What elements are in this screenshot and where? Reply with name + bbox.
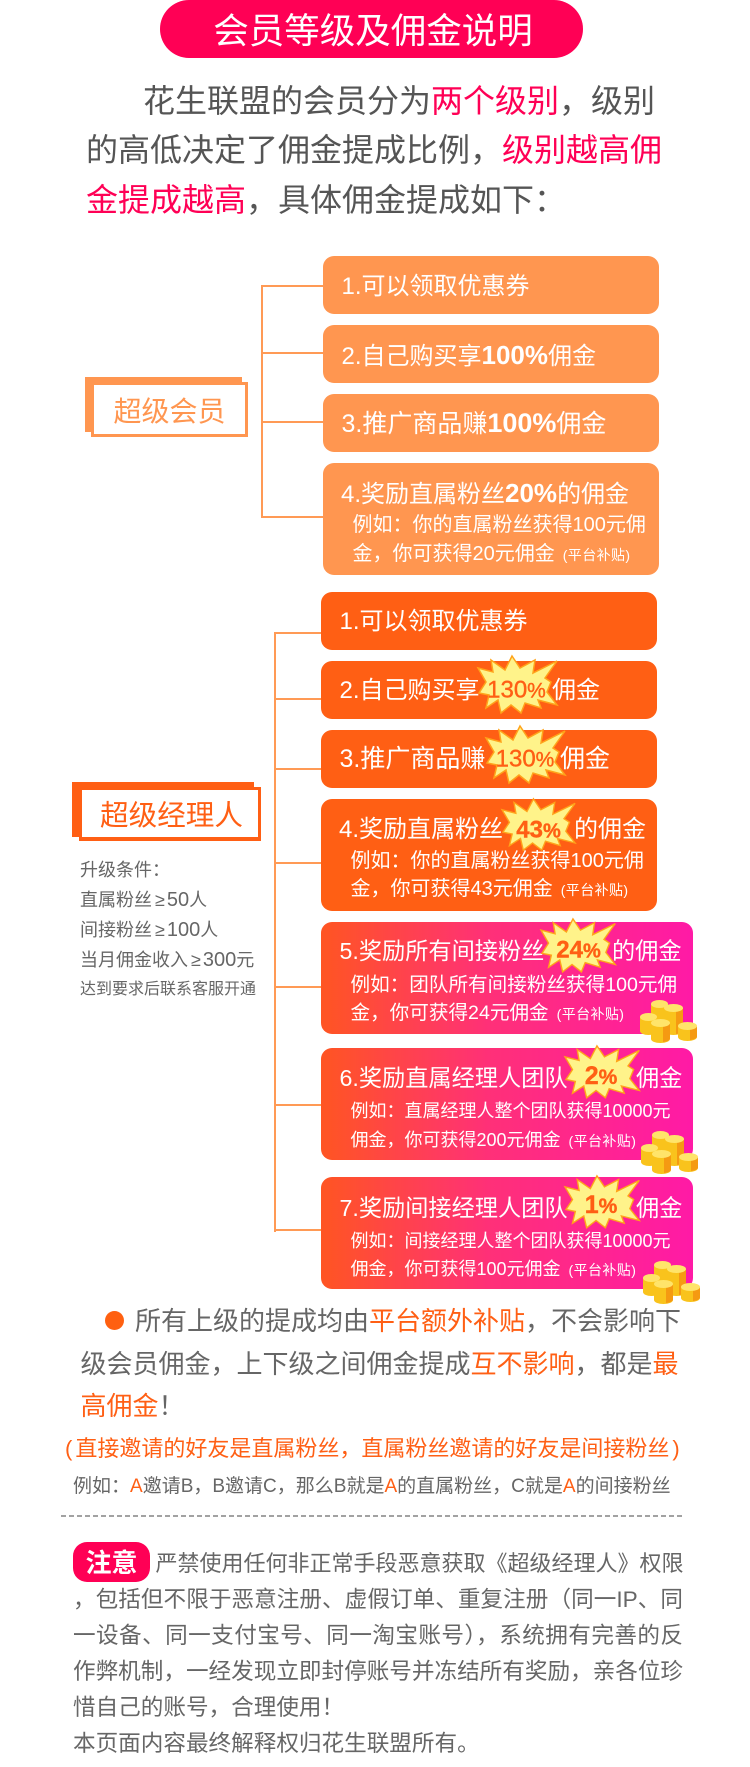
manager card 5: 的佣金: [612, 938, 682, 964]
notice badge: [73, 1542, 150, 1582]
manager card 3: 3.推广商品赚: [340, 745, 485, 773]
manager card 4: [321, 799, 657, 911]
upgrade conditions: 间接粉丝≥100人: [80, 919, 218, 941]
manager card 6: 6.奖励直属经理人团队: [340, 1065, 568, 1091]
upgrade conditions: 达到要求后联系客服开通: [80, 980, 256, 998]
manager card 5: 金，你可获得24元佣金 (平台补贴): [350, 1002, 624, 1024]
intro paragraph: [86, 82, 662, 218]
icon: orange bullet: [105, 1311, 124, 1330]
orange definition line: (直接邀请的好友是直属粉丝，直属粉丝邀请的好友是间接粉丝): [65, 1436, 680, 1461]
example line: 例如：A邀请B，B邀请C，那么B就是A的直属粉丝，C就是A的间接粉丝: [73, 1476, 671, 1497]
intro paragraph: 的高低决定了佣金提成比例，级别越高佣: [86, 132, 662, 168]
label: super manager: [72, 782, 261, 841]
title banner: [160, 0, 583, 58]
member card 4: 金，你可获得20元佣金 (平台补贴): [352, 543, 630, 565]
manager card 2: 130%: [487, 676, 546, 704]
member card 2: 2.自己购买享100%佣金: [342, 340, 596, 370]
manager card 7: 佣金: [636, 1195, 682, 1221]
member card 3: 3.推广商品赚100%佣金: [342, 408, 606, 438]
title banner: 会员等级及佣金说明: [213, 11, 533, 51]
manager card 2: 佣金: [552, 677, 600, 704]
manager card 7: 佣金，你可获得100元佣金 (平台补贴): [350, 1258, 636, 1278]
manager card 6: 佣金: [636, 1065, 682, 1091]
icon: gold coins: [643, 1261, 700, 1304]
label: super member: 超级会员: [113, 396, 226, 427]
member card 4: 4.奖励直属粉丝20%的佣金: [341, 478, 629, 508]
manager card 7: 1%: [585, 1191, 618, 1219]
manager card 5: 例如：团队所有间接粉丝获得100元佣: [350, 974, 677, 996]
member card 2: [323, 325, 659, 383]
manager card 6: [321, 1048, 693, 1160]
manager card 7: 例如：间接经理人整个团队获得10000元: [350, 1231, 671, 1251]
manager card 2: 2.自己购买享: [340, 677, 480, 704]
label: super member: [85, 377, 248, 437]
upgrade conditions: 当月佣金收入≥300元: [80, 949, 254, 971]
label: super manager: 超级经理人: [100, 800, 243, 832]
intro paragraph: 金提成越高，具体佣金提成如下：: [86, 182, 566, 218]
member card 3: [323, 394, 659, 452]
manager card 4: 的佣金: [574, 816, 646, 842]
upgrade conditions: 直属粉丝≥50人: [80, 889, 207, 911]
notice paragraph: [73, 1551, 684, 1756]
member card 4: [323, 463, 659, 575]
manager card 5: [321, 922, 693, 1034]
manager card 4: 金，你可获得43元佣金 (平台补贴): [350, 878, 628, 900]
notice paragraph: 作弊机制，一经发现立即封停账号并冻结所有奖励，亲各位珍: [73, 1659, 683, 1684]
manager card 1: [321, 592, 657, 650]
icon: gold coins: [641, 1131, 698, 1174]
manager card 1: 1.可以领取优惠券: [340, 608, 528, 635]
member card 1: 1.可以领取优惠券: [342, 273, 530, 300]
manager card 5: 5.奖励所有间接粉丝: [340, 938, 544, 964]
manager card 7: [321, 1177, 693, 1289]
bullet note paragraph: 高佣金！: [80, 1390, 185, 1420]
manager card 4: 4.奖励直属粉丝: [339, 816, 503, 842]
manager card 3: 佣金: [560, 745, 610, 773]
manager card 2: [321, 661, 657, 719]
bullet note paragraph: 所有上级的提成均由平台额外补贴，不会影响下: [135, 1306, 681, 1336]
notice paragraph: ，包括但不限于恶意注册、虚假订单、重复注册（同一IP、同: [73, 1587, 683, 1612]
notice badge: 注意: [85, 1548, 138, 1578]
manager card 3: [321, 730, 657, 788]
member card 1: [323, 256, 659, 314]
notice paragraph: 一设备、同一支付宝号、同一淘宝账号），系统拥有完善的反: [73, 1623, 683, 1648]
manager card 6: 例如：直属经理人整个团队获得10000元: [350, 1101, 671, 1121]
notice paragraph: 本页面内容最终解释权归花生联盟所有。: [73, 1730, 480, 1756]
manager card 5: 24%: [556, 936, 601, 964]
upgrade conditions: [80, 860, 256, 998]
upgrade conditions: 升级条件：: [80, 860, 170, 880]
notice paragraph: 惜自己的账号，合理使用！: [73, 1694, 344, 1720]
member card 4: 例如：你的直属粉丝获得100元佣: [352, 514, 646, 536]
manager card 6: 2%: [585, 1062, 618, 1090]
manager card 3: 130%: [495, 746, 554, 772]
icon: gold coins: [640, 1000, 697, 1043]
manager card 6: 佣金，你可获得200元佣金 (平台补贴): [350, 1130, 636, 1150]
notice paragraph: 严禁使用任何非正常手段恶意获取《超级经理人》权限: [156, 1551, 684, 1576]
bullet note paragraph: [80, 1306, 681, 1420]
bullet note paragraph: 级会员佣金，上下级之间佣金提成互不影响，都是最: [80, 1348, 679, 1378]
manager card 4: 43%: [516, 816, 561, 844]
intro paragraph: 花生联盟的会员分为两个级别，级别: [143, 82, 655, 118]
manager card 7: 7.奖励间接经理人团队: [340, 1195, 568, 1221]
manager card 4: 例如：你的直属粉丝获得100元佣: [350, 850, 644, 872]
